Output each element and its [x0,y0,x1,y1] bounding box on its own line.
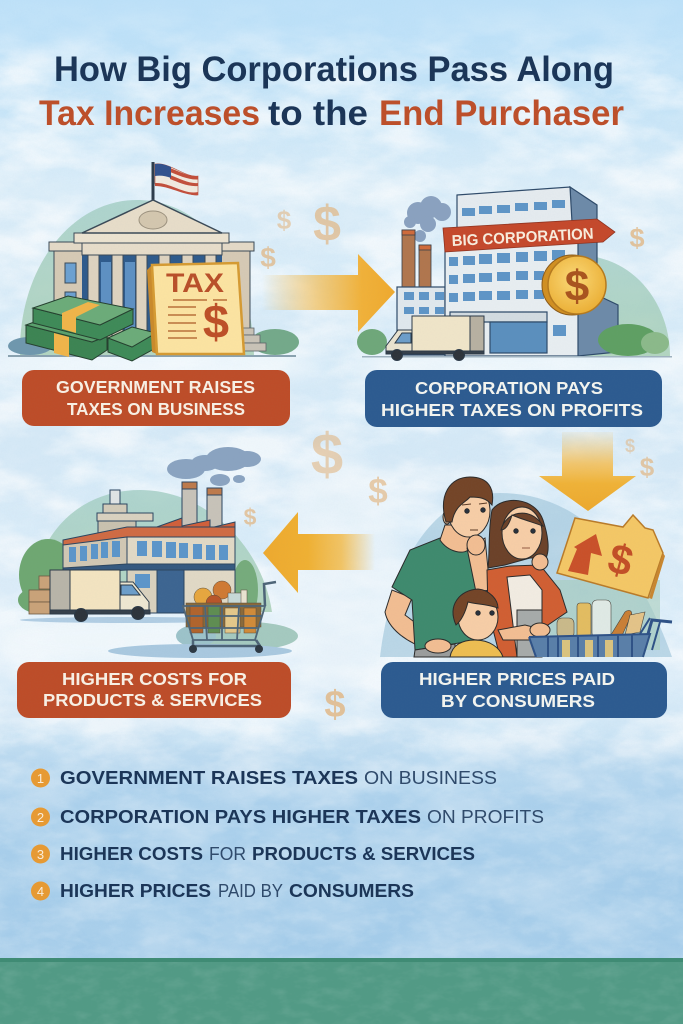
list item 3: 3 [37,847,44,862]
icon: big corporation sign [443,219,615,252]
list item 1: 1 [37,771,44,786]
factory dome backdrop [30,490,272,612]
dollar signs floating in background: $ [368,472,388,511]
icon: rising price tag [557,515,665,599]
government dome backdrop [20,200,254,355]
lower bush and ground shadow [20,617,298,658]
icon: woman with orange cardigan [487,500,567,657]
bushes and ground [8,329,299,357]
panel: higher costs factory [18,447,298,658]
list item 1: GOVERNMENT RAISES TAXES [60,768,358,788]
panel: higher prices consumers [380,477,672,657]
dollar signs floating in background: $ [640,452,655,482]
dollar signs floating in background: $ [324,684,346,726]
dollar signs floating in background: $ [311,422,343,487]
dollar signs floating in background [244,196,655,726]
list item 4: HIGHER PRICES [60,881,211,901]
icon: rising price tag: $ [603,534,638,585]
list item 4 [31,881,414,901]
list item 1 [31,768,497,788]
icon: groceries [557,600,645,640]
icon: shopping cart with goods [183,581,276,653]
list item 3 [31,844,475,864]
list item 3: HIGHER COSTS [60,844,203,864]
consumers dome backdrop [380,493,672,657]
list item 2: ON PROFITS [427,807,544,827]
icon: stacks of cash [26,296,156,361]
icon: bushes [18,539,258,620]
arrow: consumers to costs [263,512,375,593]
icon: smoke cloud [404,196,451,242]
icon: big corporation sign: BIG CORPORATION [451,226,594,250]
title: End Purchaser [379,94,624,133]
title: Tax Increases [39,94,260,133]
list item 1: ON BUSINESS [364,768,497,788]
dollar signs floating in background: $ [625,436,635,456]
label: government raises taxes: TAXES ON BUSINESS [67,399,245,419]
icon: american flag [152,162,198,202]
label: government raises taxes: GOVERNMENT RAISES [56,377,255,397]
dollar signs floating in background: $ [260,242,276,273]
label: corporation pays higher taxes [365,370,662,427]
corporation dome backdrop [470,255,670,356]
panel: government raises taxes [8,162,299,361]
title: to the [268,94,368,133]
list item 2 [31,807,544,827]
icon: shopping cart [529,618,672,657]
dollar signs floating in background: $ [277,205,292,235]
icon: tax document [147,263,244,354]
icon: building steps [243,328,266,351]
icon: smoke cloud [167,447,261,486]
dollar signs floating in background: $ [629,223,645,253]
list item 4: CONSUMERS [289,881,414,901]
icon: cardboard boxes [29,576,50,614]
dollar signs floating in background: $ [244,504,257,530]
icon: tax document: $ [203,295,229,348]
label: government raises taxes [22,370,290,426]
list item 3: FOR [209,844,246,864]
list item 2: 2 [37,810,44,825]
title [39,50,624,133]
icon: tax document: TAX [166,268,224,298]
list item 3: PRODUCTS & SERVICES [252,844,475,864]
list item 4: PAID BY [218,881,283,901]
icon: bushes [357,324,669,356]
arrow: government to corporation [262,254,395,332]
icon: delivery truck [386,316,484,360]
label: corporation pays higher taxes: HIGHER TAXES ON PROFITS [381,400,643,420]
dollar signs floating in background: $ [313,196,341,252]
icon: child with yellow shirt [425,589,503,657]
icon: big corporation building [397,187,618,356]
icon: delivery truck [50,570,150,622]
label: corporation pays higher taxes: CORPORATION PAYS [415,378,603,398]
label: higher costs: PRODUCTS & SERVICES [43,690,262,710]
label: higher prices: HIGHER PRICES PAID [419,669,615,689]
label: higher costs [17,662,291,718]
icon: gold coin [542,255,606,315]
panel: corporation pays higher taxes [357,187,672,360]
list item 4: 4 [37,884,44,899]
icon: factory building [63,482,235,613]
label: higher costs: HIGHER COSTS FOR [62,669,247,689]
icon: government building [49,200,254,346]
list item 2: CORPORATION PAYS HIGHER TAXES [60,807,421,827]
arrow: corporation to consumers [539,432,636,511]
title: How Big Corporations Pass Along [54,50,614,89]
green ground band [0,958,683,1024]
label: higher prices: BY CONSUMERS [441,691,595,711]
label: higher prices [381,662,667,718]
icon: chimneys [402,230,431,287]
icon: gold coin: $ [565,262,589,311]
icon: man with green shirt [385,477,493,657]
numbered summary list [31,768,544,901]
